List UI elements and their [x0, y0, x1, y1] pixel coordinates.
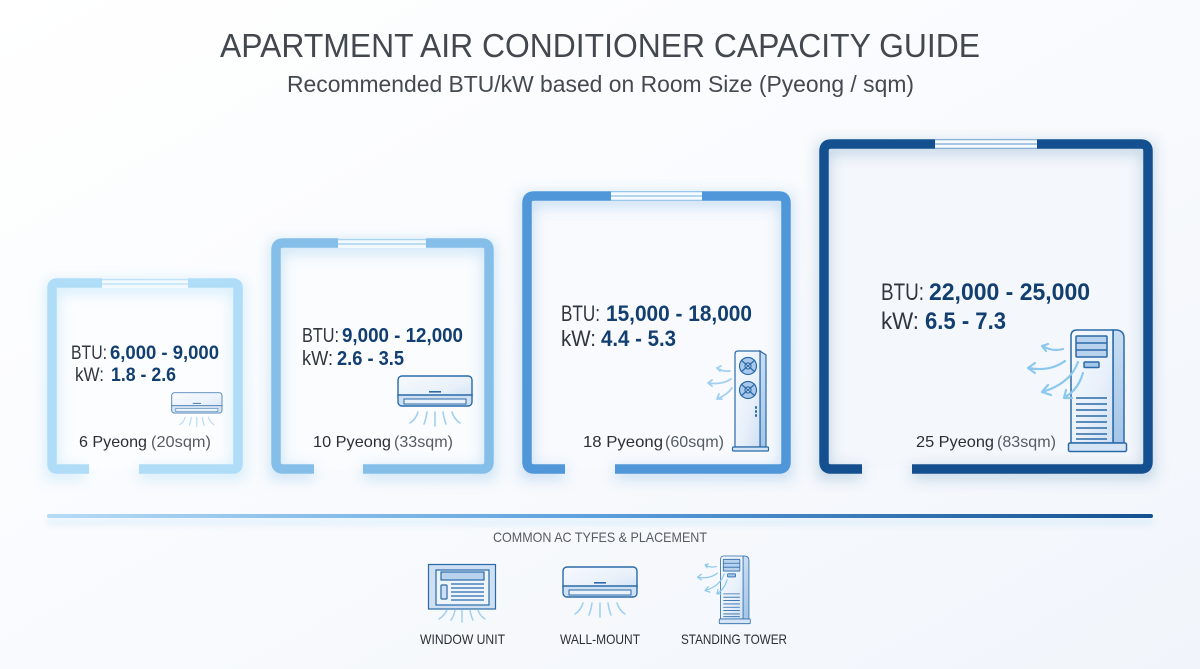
- panel: 10 pyeong room: [276, 238, 489, 473]
- room size label: (20sqm): [151, 434, 211, 451]
- capacity figures: 2.6 - 3.5: [337, 348, 404, 370]
- subtitle: Recommended BTU/kW based on Room Size (Pyeong / sqm): [287, 71, 914, 97]
- capacity figures: 4.4 - 5.3: [601, 326, 676, 351]
- room walls: [52, 283, 238, 469]
- capacity figures: 1.8 - 2.6: [111, 365, 176, 386]
- capacity figures: BTU:: [302, 325, 339, 347]
- capacity figures: 9,000 - 12,000: [342, 325, 463, 347]
- room size label: 6 Pyeong: [79, 434, 147, 451]
- capacity figures: BTU:: [71, 343, 107, 364]
- icon: standing tower unit: [698, 556, 750, 624]
- icon: standing tower unit: [1028, 330, 1126, 452]
- label: STANDING TOWER: [681, 631, 787, 647]
- room walls: [276, 243, 489, 469]
- capacity figures: BTU:: [561, 301, 600, 326]
- icon: wall-mount unit: [563, 567, 637, 617]
- label: WINDOW UNIT: [420, 631, 505, 647]
- legend: wall-mount: [560, 567, 640, 647]
- icon: window unit: [428, 564, 496, 622]
- icon: wall-mount unit: [398, 376, 472, 426]
- capacity figures: BTU:: [881, 279, 924, 306]
- capacity figures: [302, 325, 463, 370]
- capacity figures: [561, 301, 752, 351]
- panel: 18 pyeong room: [527, 191, 786, 473]
- window: [338, 238, 426, 248]
- legend: window unit: [420, 564, 505, 647]
- room size label: [313, 434, 453, 451]
- divider: [47, 514, 1153, 525]
- legend: standing tower: [681, 556, 787, 647]
- room size label: (83sqm): [997, 434, 1056, 451]
- capacity figures: 15,000 - 18,000: [606, 301, 752, 326]
- panel: 25 pyeong room: [824, 139, 1148, 473]
- icon: slim fan tower: [708, 351, 768, 451]
- room size label: [916, 434, 1056, 451]
- window: [935, 139, 1037, 149]
- capacity figures: 6,000 - 9,000: [110, 343, 219, 364]
- room size label: [583, 434, 724, 451]
- title: APARTMENT AIR CONDITIONER CAPACITY GUIDE: [220, 27, 980, 64]
- capacity figures: kW:: [561, 326, 596, 351]
- room walls: [527, 196, 786, 469]
- icon: wall-mount unit: [172, 393, 222, 427]
- room walls: [824, 144, 1148, 469]
- capacity figures: [71, 343, 219, 386]
- room size label: 18 Pyeong: [583, 434, 663, 451]
- room size label: 25 Pyeong: [916, 434, 994, 451]
- capacity figures: kW:: [302, 348, 333, 370]
- capacity figures: 6.5 - 7.3: [925, 308, 1006, 335]
- room size label: (60sqm): [665, 434, 724, 451]
- capacity figures: 22,000 - 25,000: [929, 279, 1090, 306]
- room size label: [79, 434, 211, 451]
- capacity figures: [881, 279, 1090, 335]
- room size label: (33sqm): [394, 434, 453, 451]
- room size label: 10 Pyeong: [313, 434, 391, 451]
- capacity figures: kW:: [881, 308, 919, 335]
- capacity figures: kW:: [75, 365, 104, 386]
- window: [102, 278, 188, 288]
- legend heading: COMMON AC TYFES & PLACEMENT: [493, 529, 707, 545]
- window: [611, 191, 702, 201]
- panel: 6 pyeong room: [52, 278, 238, 473]
- label: WALL-MOUNT: [560, 631, 640, 647]
